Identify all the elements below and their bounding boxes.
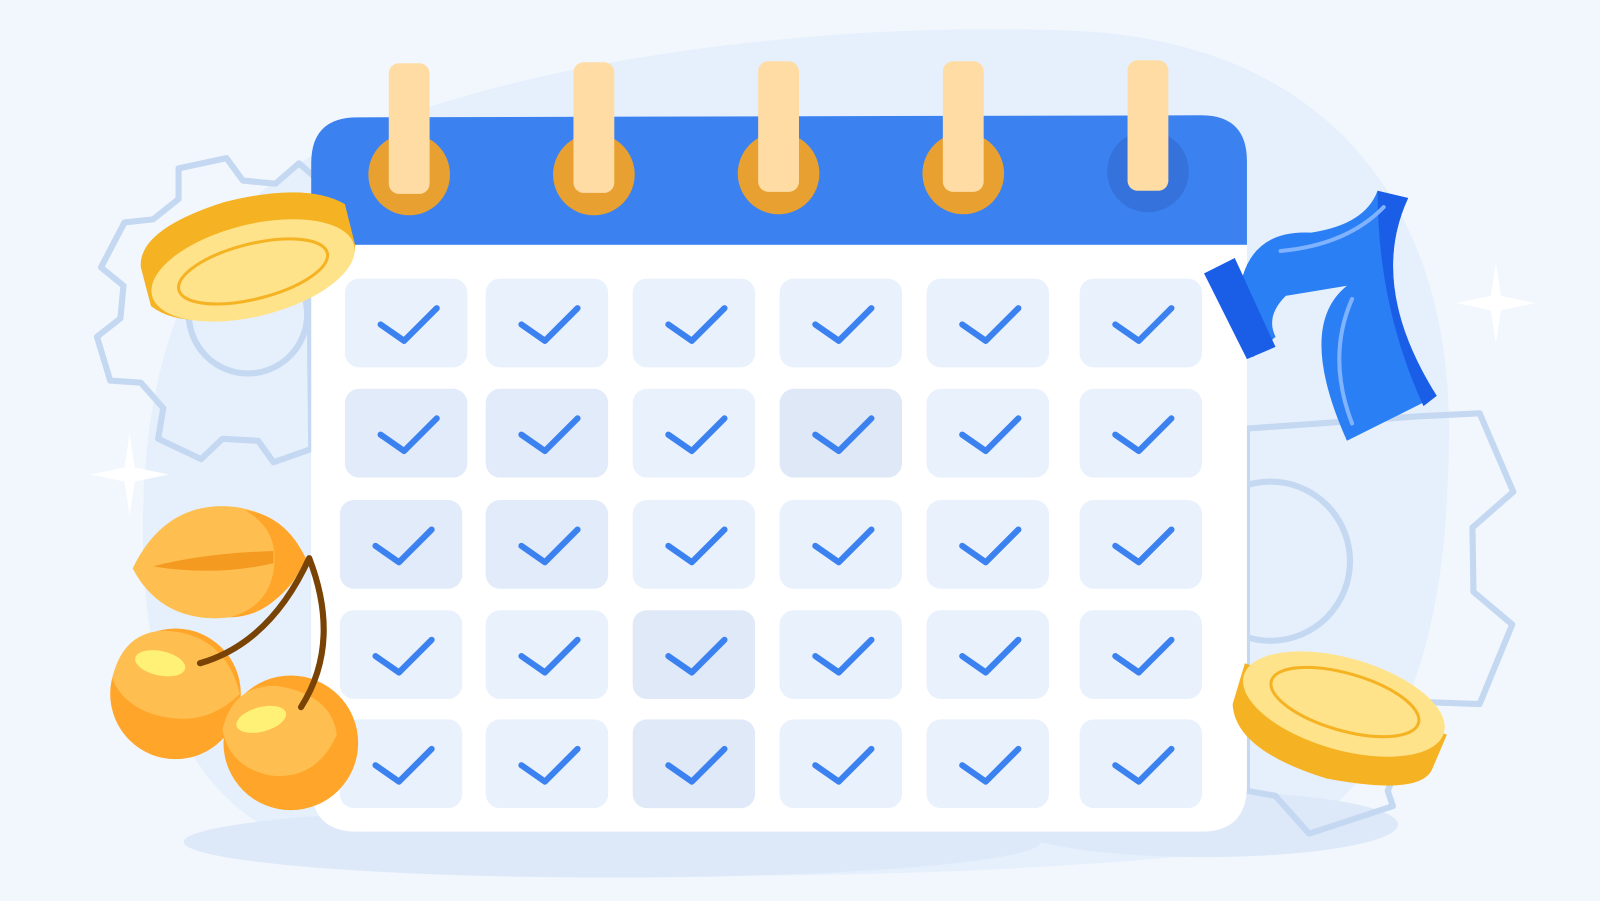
calendar header — [311, 115, 1247, 245]
sparkles — [91, 263, 1536, 515]
cherries — [110, 506, 358, 810]
checked day grid — [340, 279, 1202, 808]
coin bottom-right — [1231, 631, 1457, 786]
gear right — [1191, 413, 1513, 834]
coin top-left — [141, 192, 365, 340]
background blob — [143, 29, 1449, 878]
gear left — [97, 158, 316, 462]
hand icon — [1204, 191, 1437, 441]
calendar — [311, 60, 1247, 832]
rings — [368, 60, 1189, 215]
calendar body — [311, 245, 1247, 832]
